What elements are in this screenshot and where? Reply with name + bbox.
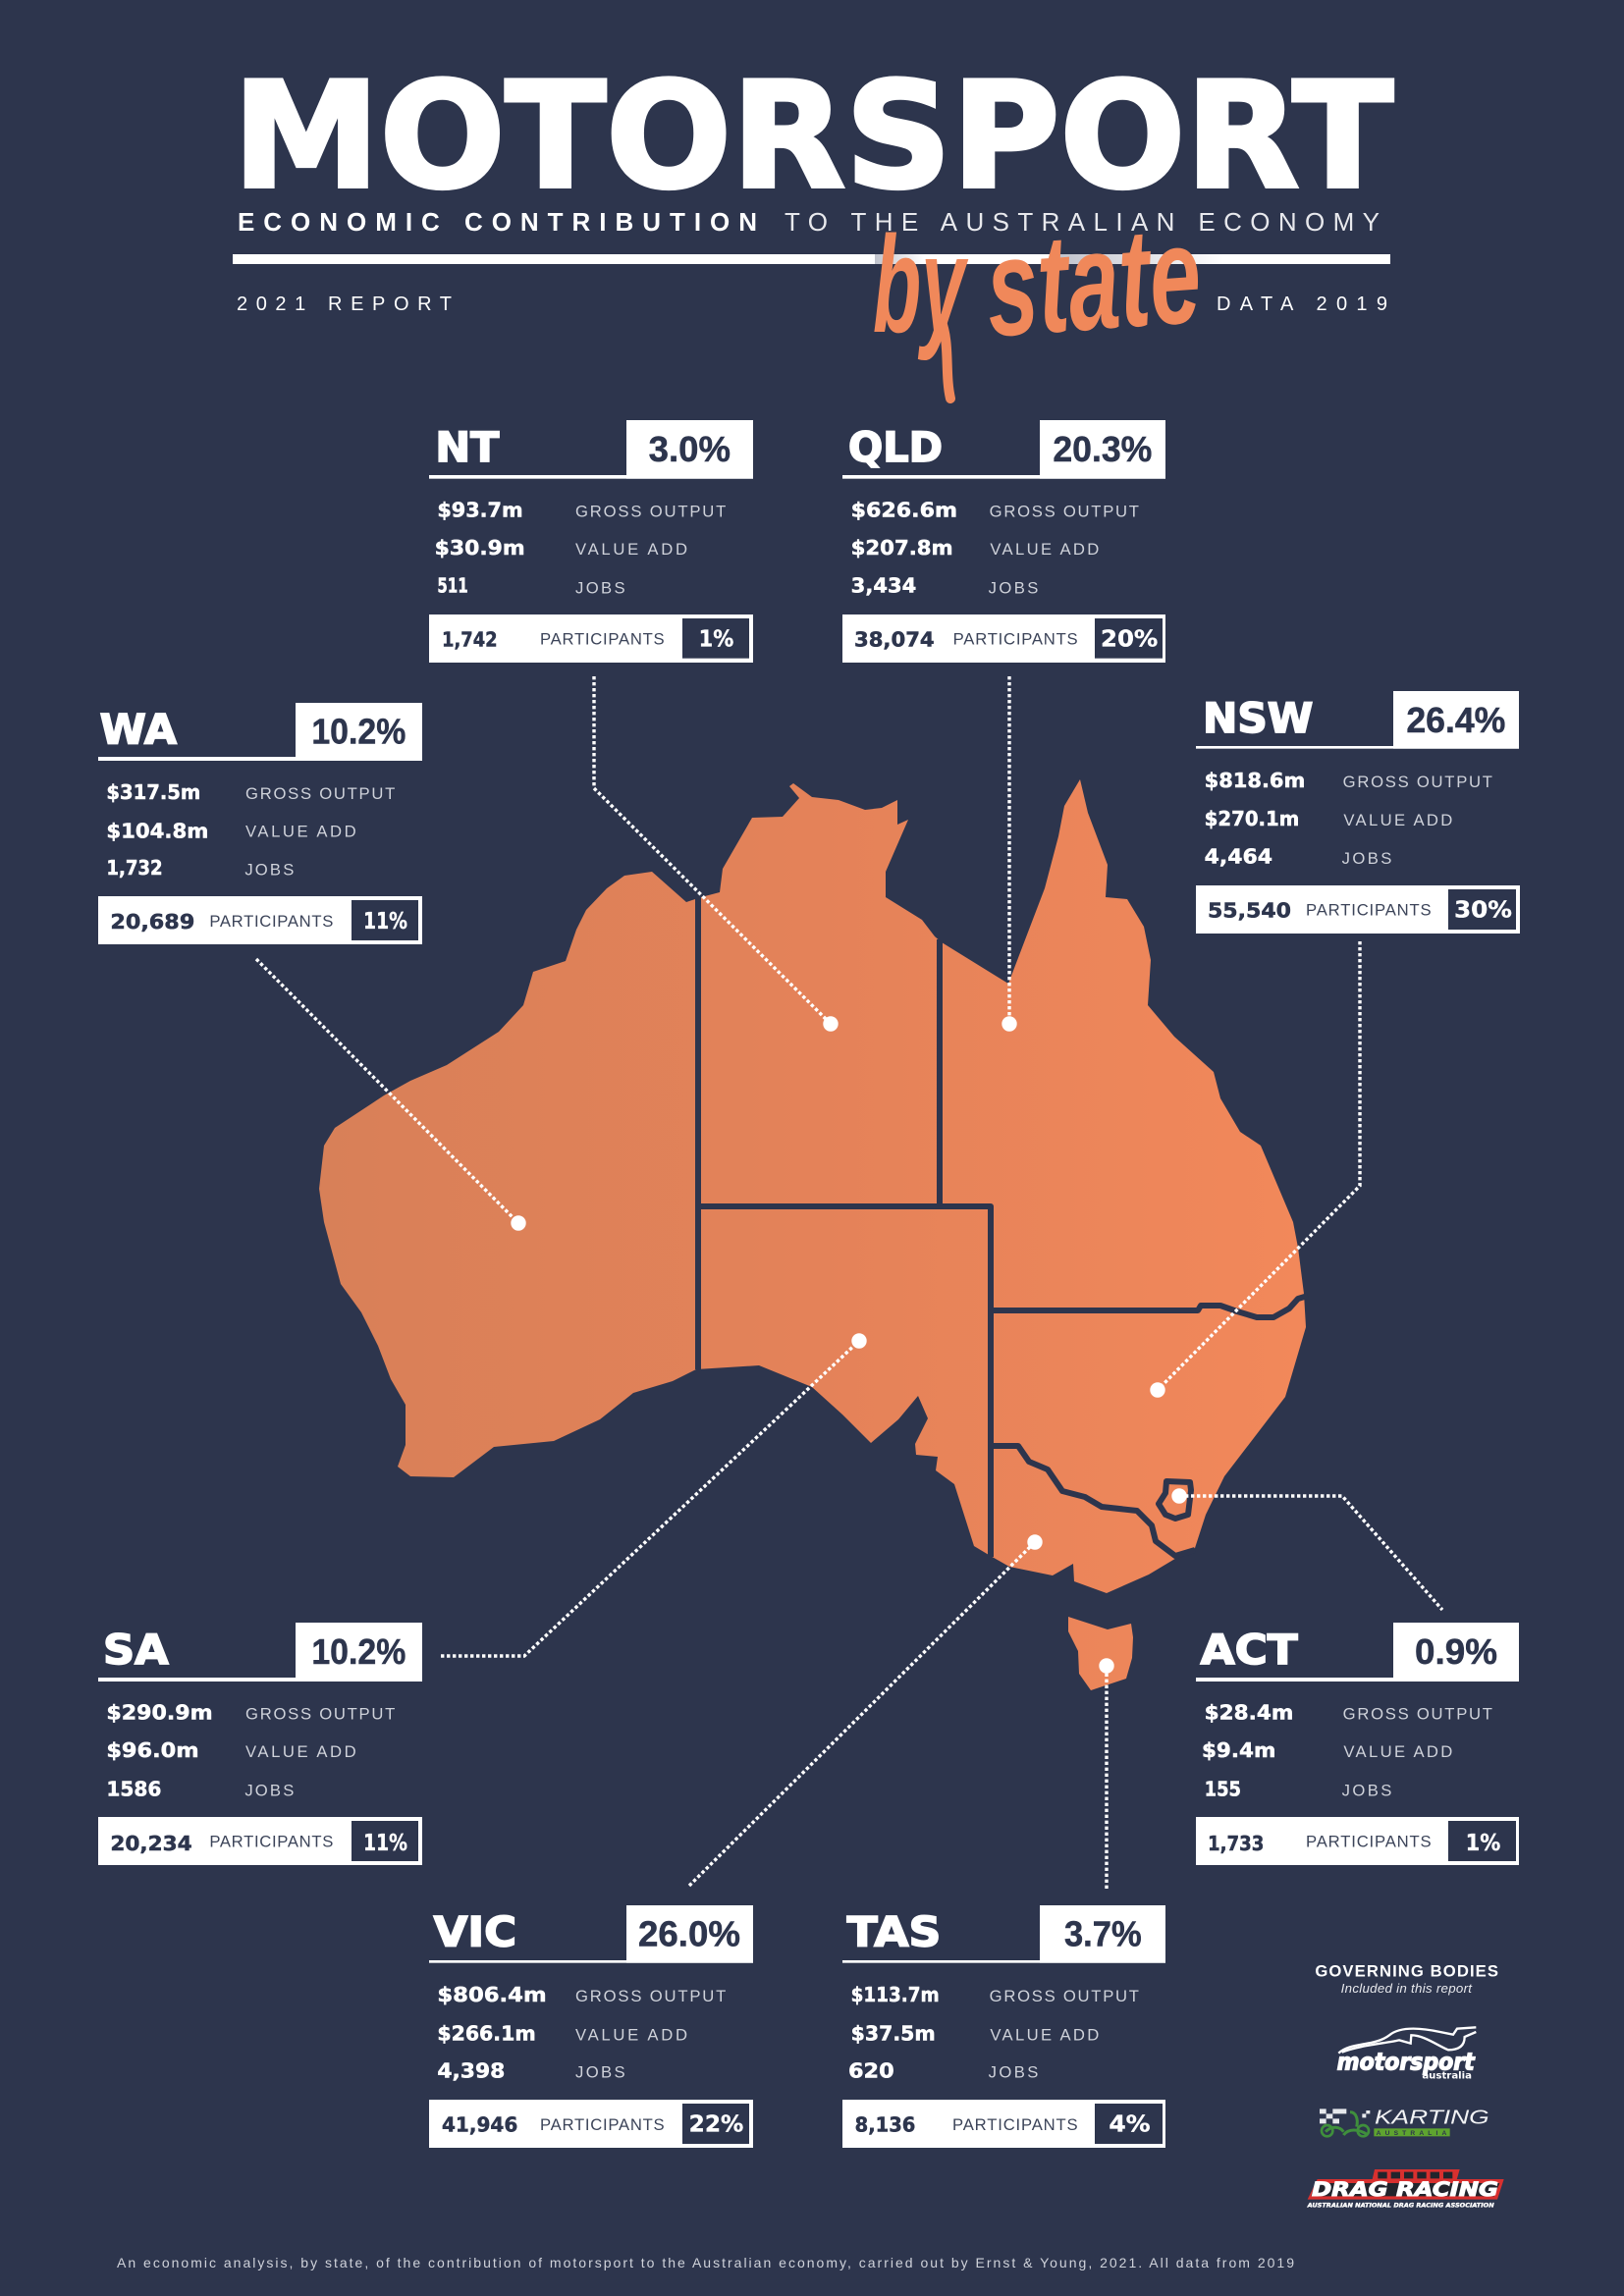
stats ACT: $28.4m	[1205, 1701, 1293, 1725]
leader: NSW	[1150, 941, 1360, 1398]
heading NT: NT	[435, 423, 500, 471]
header	[233, 52, 1393, 399]
logo: Karting Australia: KARTING	[1375, 2107, 1489, 2128]
leader: SA	[441, 1333, 867, 1656]
share SA: 10.2%	[311, 1632, 406, 1672]
stats ACT: 155	[1205, 1777, 1241, 1800]
share TAS: 3.7%	[1064, 1914, 1142, 1953]
stats NT: 511	[437, 573, 468, 597]
share WA	[296, 703, 422, 761]
stats NSW: JOBS	[1342, 849, 1391, 868]
participants NSW	[1196, 885, 1520, 934]
participants QLD	[842, 614, 1165, 663]
participants SA	[98, 1817, 422, 1865]
governing bodies heading	[1315, 1961, 1498, 1996]
state borders	[698, 897, 1308, 1557]
main title: MOTORSPORT	[233, 52, 1393, 222]
stats TAS: VALUE ADD	[990, 2025, 1099, 2044]
by state script	[873, 196, 1206, 399]
participants QLD: 38,074	[854, 627, 935, 651]
logo: Karting Australia	[1320, 2107, 1489, 2137]
leader: VIC	[689, 1534, 1043, 1886]
leader: NT	[594, 676, 839, 1032]
stats QLD: JOBS	[989, 578, 1038, 597]
stats QLD: 3,434	[851, 573, 916, 597]
stats ACT: $9.4m	[1202, 1738, 1275, 1762]
stats ACT: GROSS OUTPUT	[1343, 1705, 1492, 1724]
participants VIC: 22%	[689, 2112, 743, 2138]
heading NT	[429, 423, 753, 479]
heading QLD	[842, 423, 1165, 479]
stats SA: JOBS	[244, 1781, 294, 1799]
leader: QLD	[1001, 676, 1017, 1032]
participants SA: 20,234	[110, 1832, 192, 1855]
stats VIC	[437, 1983, 726, 2083]
share VIC: 26.0%	[638, 1914, 740, 1953]
stats QLD	[851, 499, 1139, 597]
participants VIC: 41,946	[442, 2113, 517, 2137]
stats ACT: VALUE ADD	[1343, 1742, 1452, 1761]
leader: ACT	[1171, 1488, 1442, 1610]
leader: WA	[256, 959, 526, 1231]
logo: Drag Racing	[1307, 2169, 1504, 2210]
panel: QLD	[842, 420, 1165, 663]
panel: SA	[98, 1623, 422, 1865]
heading QLD: QLD	[848, 423, 943, 471]
Tasmania	[1068, 1617, 1133, 1690]
stats SA: GROSS OUTPUT	[245, 1705, 395, 1724]
participants NSW: 30%	[1454, 897, 1512, 923]
stats TAS: 620	[848, 2059, 894, 2083]
participants NT: 1%	[699, 626, 733, 652]
stats VIC: VALUE ADD	[575, 2025, 687, 2044]
participants WA	[98, 896, 422, 944]
participants TAS: PARTICIPANTS	[952, 2115, 1078, 2134]
header rule	[233, 254, 1390, 264]
logo: Motorsport Australia	[1337, 2027, 1476, 2081]
mainland	[319, 779, 1306, 1593]
share SA	[296, 1623, 422, 1682]
participants NSW: 55,540	[1208, 898, 1291, 922]
stats TAS: $37.5m	[851, 2021, 936, 2045]
participants WA: 20,689	[110, 910, 194, 934]
stats NSW	[1205, 769, 1492, 868]
share QLD	[1040, 420, 1165, 479]
share TAS	[1040, 1905, 1165, 1963]
stats WA	[106, 780, 395, 880]
report year: 2021 REPORT	[237, 294, 452, 315]
by state script: state	[981, 196, 1206, 366]
participants VIC: PARTICIPANTS	[540, 2115, 665, 2134]
heading NSW: NSW	[1203, 694, 1313, 742]
share ACT: 0.9%	[1415, 1632, 1497, 1672]
participants WA: PARTICIPANTS	[209, 912, 333, 931]
participants ACT	[1196, 1817, 1519, 1865]
footer note: An economic analysis, by state, of the contribution of motorsport to the Australian economy, carried out by Ernst & Young, 2021. All data from 2019	[117, 2255, 1294, 2270]
participants NT: 1,742	[442, 627, 498, 651]
participants NT	[429, 614, 753, 663]
stats SA: 1586	[106, 1777, 161, 1800]
stats SA: $290.9m	[106, 1701, 213, 1725]
panel: NT	[429, 420, 753, 663]
participants ACT: PARTICIPANTS	[1306, 1833, 1432, 1851]
panel: governing bodies	[1307, 1961, 1504, 2210]
map of Australia	[319, 779, 1308, 1690]
subtitle	[238, 207, 1380, 237]
participants TAS: 4%	[1109, 2112, 1151, 2138]
stats NSW: $818.6m	[1205, 769, 1305, 792]
stats TAS: $113.7m	[851, 1983, 940, 2006]
panel: WA	[98, 703, 422, 944]
stats NT: $30.9m	[435, 536, 525, 560]
heading ACT: ACT	[1201, 1626, 1298, 1674]
panel: NSW	[1196, 691, 1520, 934]
stats WA: VALUE ADD	[245, 823, 356, 841]
panel: ACT	[1196, 1623, 1519, 1865]
heading SA	[98, 1626, 422, 1682]
subtitle: TO THE AUSTRALIAN ECONOMY	[785, 207, 1380, 237]
heading TAS: TAS	[847, 1907, 941, 1955]
stats WA: $317.5m	[106, 780, 200, 804]
leader lines and markers	[256, 676, 1442, 1889]
stats NT	[435, 499, 726, 597]
heading WA	[98, 705, 422, 761]
stats VIC: 4,398	[437, 2059, 505, 2083]
panel: VIC	[429, 1905, 753, 2148]
stats NSW: GROSS OUTPUT	[1343, 773, 1492, 791]
participants SA: PARTICIPANTS	[209, 1833, 333, 1851]
share QLD: 20.3%	[1053, 430, 1152, 469]
stats NT: VALUE ADD	[575, 540, 687, 559]
participants SA: 11%	[363, 1831, 407, 1856]
logo: Drag Racing: DRAG RACING	[1312, 2178, 1498, 2201]
stats QLD: $626.6m	[851, 499, 957, 522]
stats TAS: JOBS	[989, 2063, 1038, 2082]
share NT: 3.0%	[649, 430, 731, 469]
participants NSW: PARTICIPANTS	[1306, 901, 1432, 920]
stats WA: GROSS OUTPUT	[245, 784, 395, 803]
stats NSW: VALUE ADD	[1343, 811, 1452, 829]
data year: DATA 2019	[1217, 294, 1387, 315]
stats VIC: JOBS	[575, 2063, 625, 2082]
stats QLD: VALUE ADD	[990, 540, 1099, 559]
share VIC	[626, 1905, 753, 1963]
heading SA: SA	[103, 1626, 169, 1674]
participants NT: PARTICIPANTS	[540, 630, 665, 649]
share NSW: 26.4%	[1406, 701, 1505, 740]
leader: TAS	[1099, 1658, 1114, 1889]
share NSW	[1393, 691, 1519, 749]
stats SA: $96.0m	[106, 1738, 199, 1762]
stats QLD: $207.8m	[851, 536, 953, 560]
participants VIC	[429, 2100, 753, 2148]
stats NT: GROSS OUTPUT	[575, 503, 726, 521]
governing bodies heading: GOVERNING BODIES	[1315, 1961, 1498, 1980]
stats NSW: 4,464	[1205, 844, 1272, 868]
stats VIC: GROSS OUTPUT	[575, 1987, 726, 2005]
stats WA: 1,732	[106, 856, 163, 880]
share ACT	[1393, 1623, 1519, 1682]
governing bodies heading: Included in this report	[1341, 1981, 1473, 1996]
stats NT: $93.7m	[437, 499, 523, 522]
stats SA: VALUE ADD	[245, 1742, 356, 1761]
share WA: 10.2%	[311, 712, 406, 751]
logo: Motorsport Australia: australia	[1422, 2070, 1472, 2081]
heading VIC: VIC	[434, 1907, 516, 1955]
panel: TAS	[842, 1905, 1165, 2148]
heading ACT	[1196, 1626, 1519, 1682]
stats SA	[106, 1701, 395, 1800]
logo: Karting Australia: AUSTRALIA	[1377, 2130, 1447, 2137]
stats TAS: GROSS OUTPUT	[990, 1987, 1139, 2005]
stats TAS	[848, 1983, 1139, 2083]
logo: Drag Racing: AUSTRALIAN NATIONAL DRAG RACING ASSOCIATION	[1307, 2203, 1494, 2210]
logo: Motorsport Australia: motorsport	[1337, 2049, 1476, 2076]
participants WA: 11%	[363, 909, 407, 934]
participants QLD: PARTICIPANTS	[953, 630, 1078, 649]
stats WA: JOBS	[244, 861, 294, 880]
heading WA: WA	[100, 705, 178, 753]
by state script: by	[873, 207, 969, 361]
subtitle: ECONOMIC CONTRIBUTION	[238, 207, 757, 237]
stats ACT: JOBS	[1342, 1781, 1391, 1799]
stats NT: JOBS	[575, 578, 625, 597]
participants ACT: 1,733	[1208, 1832, 1264, 1855]
stats QLD: GROSS OUTPUT	[990, 503, 1139, 521]
stats VIC: $806.4m	[437, 1983, 547, 2006]
participants ACT: 1%	[1466, 1831, 1500, 1856]
stats NSW: $270.1m	[1205, 807, 1299, 830]
participants QLD: 20%	[1101, 626, 1158, 652]
share NT	[626, 420, 753, 479]
stats WA: $104.8m	[106, 819, 208, 842]
participants TAS: 8,136	[855, 2113, 915, 2137]
stats ACT	[1202, 1701, 1492, 1800]
stats VIC: $266.1m	[437, 2021, 536, 2045]
participants TAS	[842, 2100, 1165, 2148]
